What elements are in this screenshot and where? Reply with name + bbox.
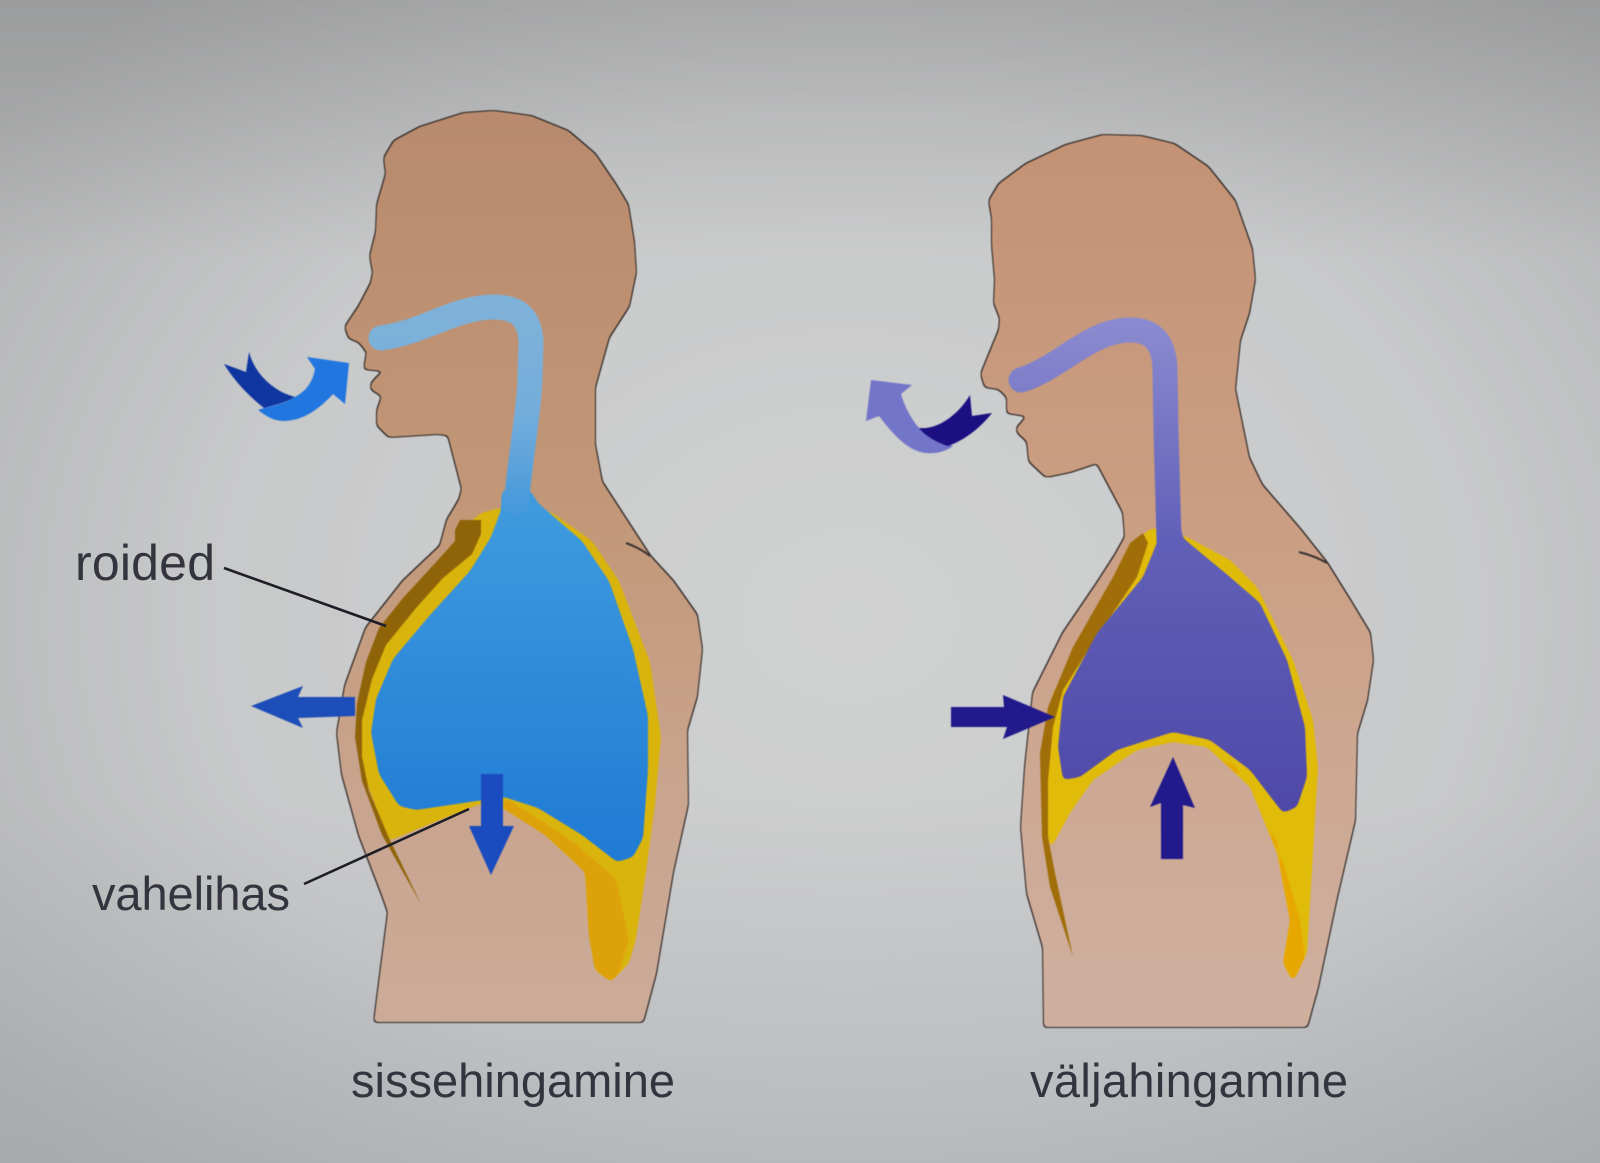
diaphragm: inhalation [504,797,629,982]
ribs: exhalation [1040,533,1148,957]
ribs: inhalation [355,520,481,904]
arrow: diaphragm up [1150,757,1195,859]
pleura yellow layer: exhalation [1042,528,1318,982]
airway: exhalation [1021,330,1169,540]
lung: inhalation [371,490,648,862]
label: vahelihas: vahelihas [92,867,290,920]
diaphragm: exhalation [1200,743,1305,982]
arrow: chest outward [251,686,355,728]
pleura yellow layer: inhalation [357,508,661,982]
arrow: air in [224,352,349,421]
figure: inhalation [224,111,702,1022]
arrow: chest inward [951,695,1055,739]
arm line: inhalation [626,543,650,556]
arm line: exhalation [1299,552,1327,563]
arrow: air out [866,380,992,453]
label: roided: roided [75,535,215,591]
body silhouette: inhalation [337,111,702,1022]
figure: exhalation [866,135,1373,1027]
leader line: vahelihas [304,809,469,884]
body silhouette: exhalation [981,135,1373,1027]
caption: sissehingamine: sissehingamine [351,1054,675,1107]
caption: väljahingamine: väljahingamine [1030,1054,1348,1107]
airway: inhalation [381,307,531,505]
leader line: roided [224,568,386,626]
arrow: diaphragm down [469,774,514,875]
lung: exhalation [1058,525,1307,813]
